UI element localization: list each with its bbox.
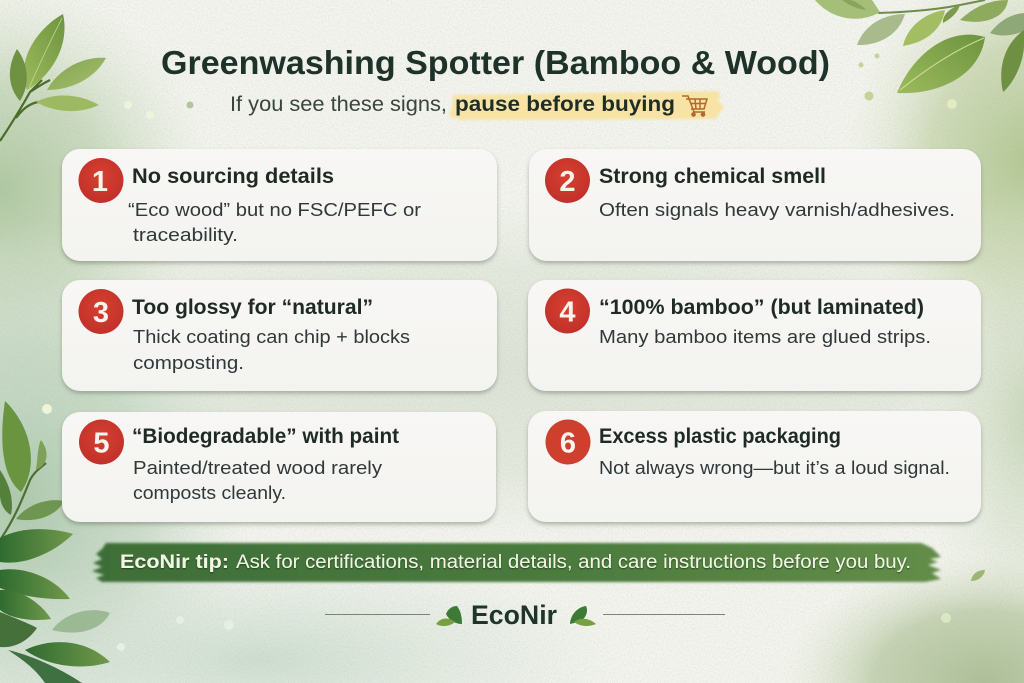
subtitle xyxy=(230,91,724,120)
text 4: Many bamboo items are glued strips. xyxy=(599,326,931,347)
text 3: composting. xyxy=(133,352,244,373)
badge 1 xyxy=(78,158,124,203)
title: Greenwashing Spotter (Bamboo & Wood) xyxy=(161,44,830,81)
brush stroke xyxy=(92,543,941,582)
highlight stroke xyxy=(449,91,724,120)
badge 2: 2 xyxy=(559,166,576,198)
text 5 xyxy=(133,457,383,503)
heading 4: “100% bamboo” (but laminated) xyxy=(599,296,924,319)
panel: sign 4 xyxy=(528,280,981,391)
badge 3 xyxy=(78,289,124,334)
icon: left leaf xyxy=(436,606,462,626)
tip text: EcoNir tip: xyxy=(120,552,229,573)
badge 4 xyxy=(545,288,590,334)
badge 4: 4 xyxy=(559,296,576,328)
panel: sign 1 xyxy=(62,149,497,261)
text 1: traceability. xyxy=(133,224,238,245)
subtitle text: pause before buying xyxy=(455,93,675,116)
badge 3: 3 xyxy=(93,297,109,329)
small floating leaf xyxy=(971,570,985,581)
subtitle text: If you see these signs, xyxy=(230,93,447,116)
text 1 xyxy=(128,199,421,245)
badge 5 xyxy=(79,420,124,464)
icon: shopping cart xyxy=(682,96,707,116)
tip text: Ask for certifications, material details, and care instructions before you buy. xyxy=(236,552,911,573)
panel: sign 6 xyxy=(528,411,981,522)
text 1: “Eco wood” but no FSC/PEFC or xyxy=(128,199,421,220)
heading 3: Too glossy for “natural” xyxy=(132,296,373,319)
badge 2 xyxy=(545,158,590,203)
icon: right leaf xyxy=(570,606,596,626)
text 3: Thick coating can chip + blocks xyxy=(133,326,410,347)
text 3 xyxy=(133,326,410,373)
leaves: top-right branch xyxy=(815,0,1024,93)
text 6: Not always wrong—but it’s a loud signal. xyxy=(599,457,950,478)
leaves: top-left sprig xyxy=(0,14,106,141)
badge 1: 1 xyxy=(92,166,108,198)
leaves: bottom-left cluster xyxy=(0,401,110,683)
badge 5: 5 xyxy=(93,428,110,460)
heading 6: Excess plastic packaging xyxy=(599,425,841,448)
panel: sign 5 xyxy=(62,412,496,522)
text 5: Painted/treated wood rarely xyxy=(133,457,383,478)
tip banner xyxy=(92,543,941,582)
footer logo xyxy=(325,600,725,630)
badge 6: 6 xyxy=(560,428,576,460)
heading 5: “Biodegradable” with paint xyxy=(132,425,399,448)
text 2: Often signals heavy varnish/adhesives. xyxy=(599,199,955,220)
text 5: composts cleanly. xyxy=(133,482,286,503)
panel: sign 3 xyxy=(62,280,497,391)
badge 6 xyxy=(546,420,590,464)
heading 2: Strong chemical smell xyxy=(599,165,826,188)
brand name: EcoNir xyxy=(471,600,557,630)
panel: sign 2 xyxy=(529,149,981,261)
heading 1: No sourcing details xyxy=(132,165,334,188)
